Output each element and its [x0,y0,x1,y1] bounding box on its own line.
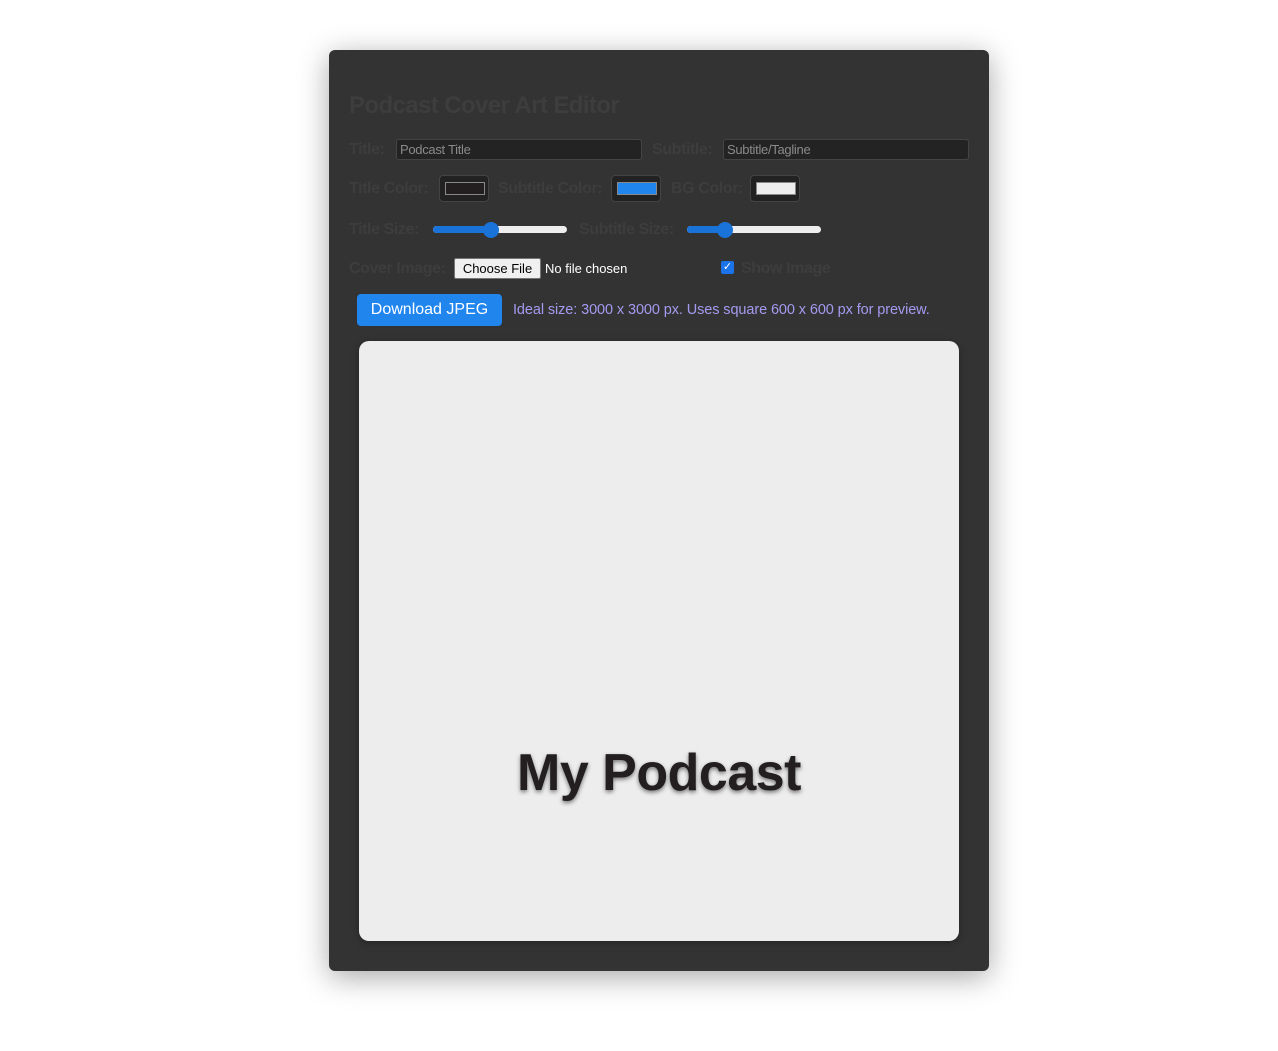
preview title: My Podcast [517,744,801,802]
button: download: Download JPEG [371,301,488,318]
label: title size: Title Size: [349,221,419,238]
note: size hint: Ideal size: 3000 x 3000 px. Uses square 600 x 600 px for preview. [513,302,930,318]
swatch: bg color [750,175,800,202]
heading: Podcast Cover Art Editor [349,92,619,119]
file input: No file chosen [545,261,627,276]
label: subtitle: Subtitle: [652,141,712,158]
input: subtitle [723,139,969,160]
label: subtitle color: Subtitle Color: [498,180,602,197]
swatch: subtitle color [611,175,661,202]
checkbox: show image [721,261,734,274]
button: download [357,294,502,326]
input: subtitle: Subtitle/Tagline [727,142,810,157]
swatch: title color [439,175,489,202]
label: bg color: BG Color: [671,180,743,197]
preview canvas [359,341,959,941]
checkbox: show image: ✓ [723,261,732,273]
label: title: Title: [349,141,385,158]
file input: Choose File [463,261,532,276]
input: title: Podcast Title [400,142,471,157]
input: title [396,139,642,160]
label: title color: Title Color: [349,180,428,197]
file input [454,258,627,279]
label: show image: Show Image [741,260,830,277]
slider: subtitle size [687,222,821,238]
panel: editor [329,50,989,971]
label: cover image: Cover Image: [349,260,446,277]
slider: title size [433,222,567,238]
label: subtitle size: Subtitle Size: [579,221,674,238]
